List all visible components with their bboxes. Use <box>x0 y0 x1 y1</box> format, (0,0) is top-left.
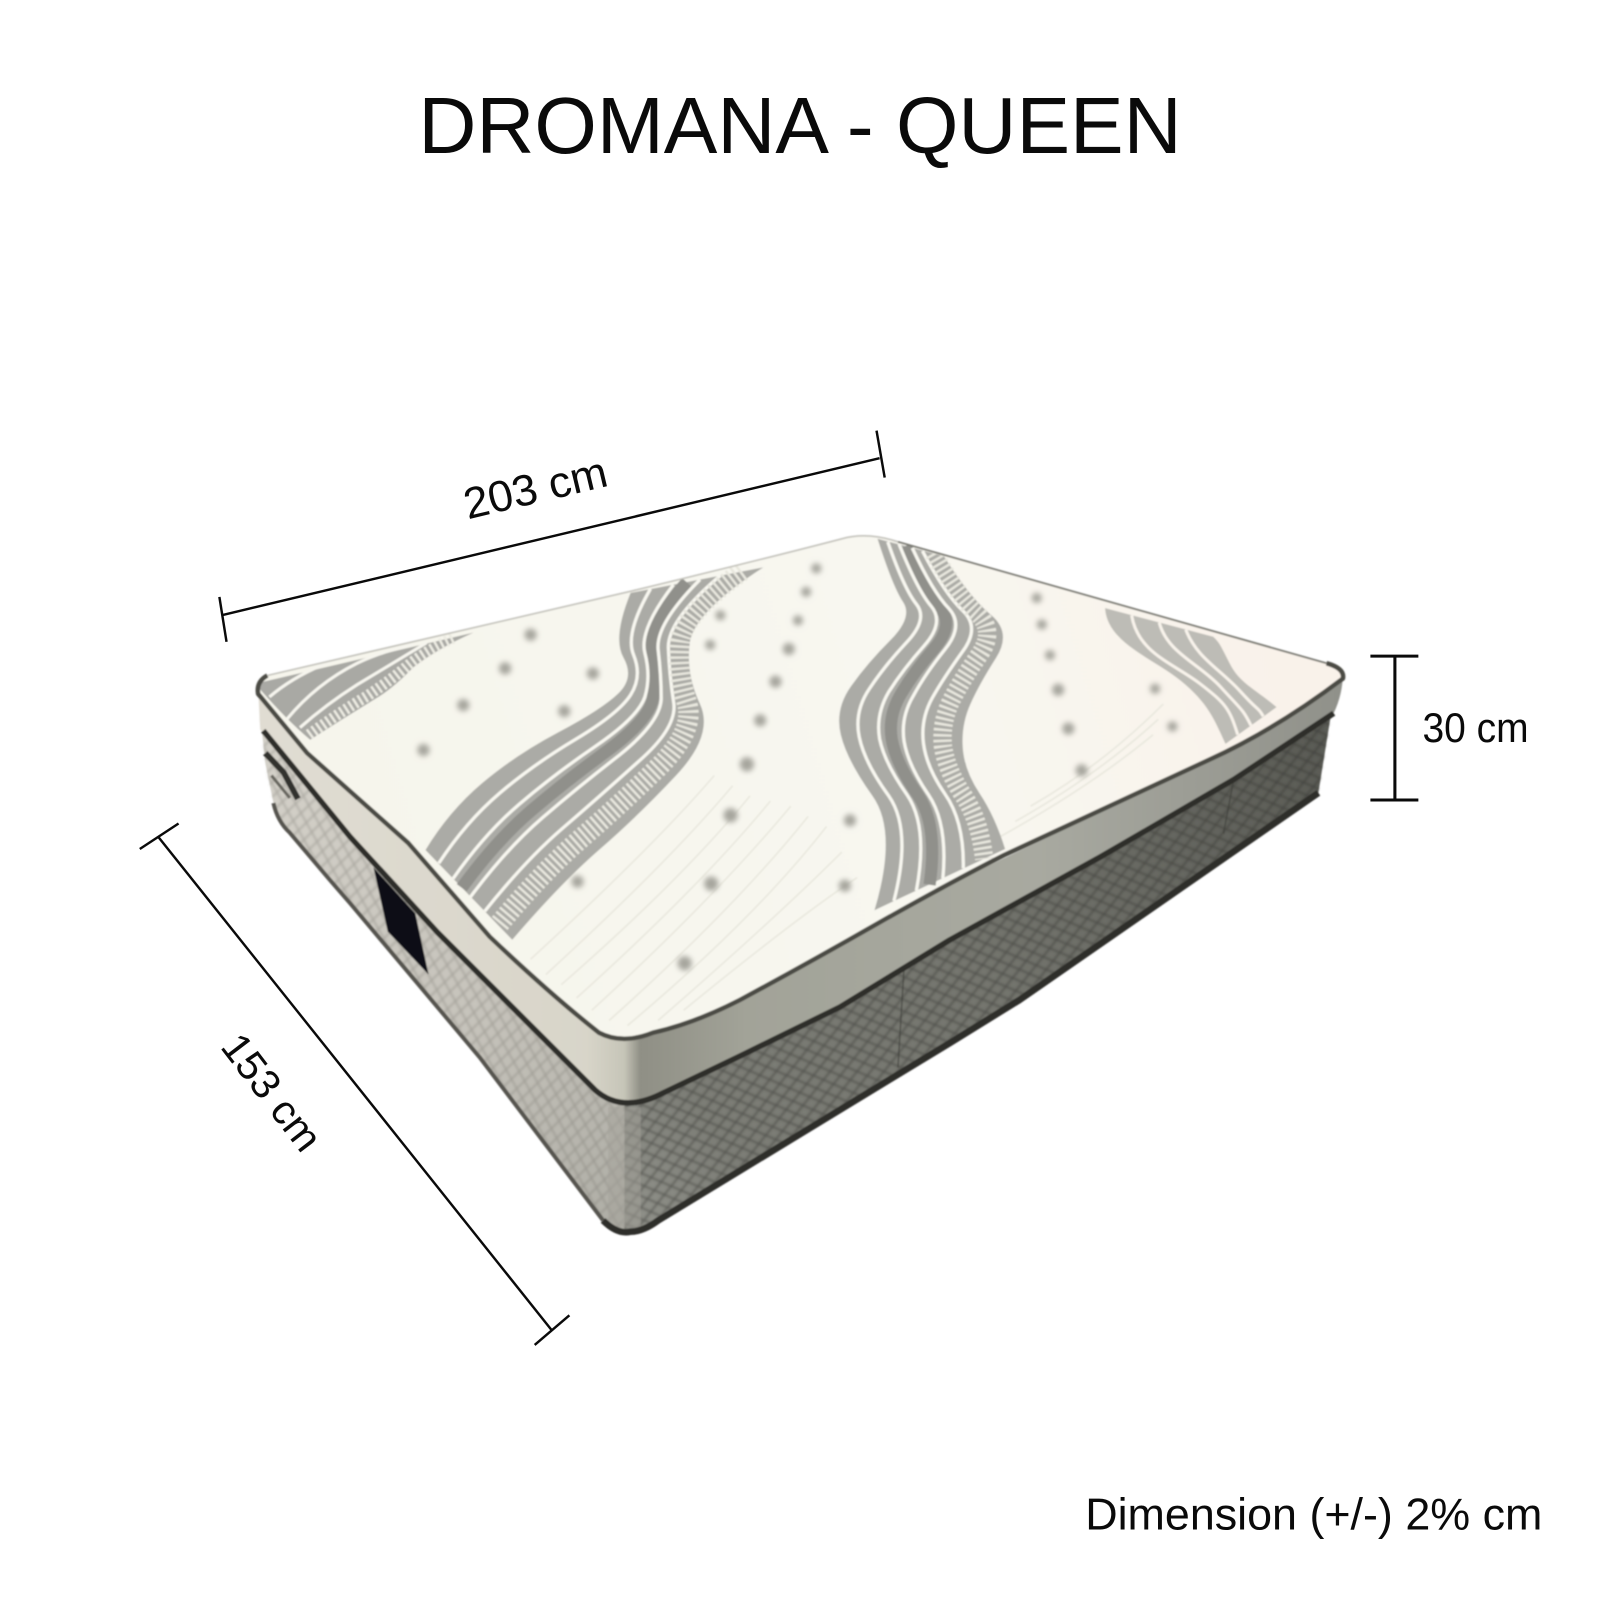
mattress illustration <box>255 536 1343 1232</box>
base front edge piping <box>603 793 1318 1232</box>
button tufts <box>417 563 1178 970</box>
dimension line: width 153 cm <box>140 823 569 1345</box>
infographic canvas <box>139 97 1540 1539</box>
back right edge outline <box>898 542 1327 663</box>
mattress top surface <box>258 536 1343 1039</box>
label: 30 cm: 30 cm <box>1422 704 1529 751</box>
black label on left face <box>373 867 429 974</box>
base panel seams <box>898 780 1234 1067</box>
top surface quilting details <box>255 539 1277 1026</box>
title: DROMANA - QUEEN <box>418 81 1182 170</box>
footnote: dimension tolerance: Dimension (+/-) 2% cm <box>1085 1491 1542 1540</box>
pillow-top side band <box>258 673 1343 1103</box>
dimension line: length 203 cm <box>219 431 885 642</box>
label: 153 cm: 153 cm <box>212 1024 331 1160</box>
top surface piping <box>258 663 1343 1039</box>
back edge soft outline <box>267 536 898 676</box>
wave stripe 2: centre left <box>426 567 763 940</box>
wave stripe 3: centre right <box>839 539 1005 910</box>
base left edge piping <box>273 803 603 1220</box>
label: 203 cm: 203 cm <box>459 448 612 529</box>
wave stripe 1: left corner <box>255 633 473 740</box>
side handle <box>265 753 298 799</box>
band lower piping <box>263 713 1334 1103</box>
corner shading <box>608 1107 641 1230</box>
fine fabric contour lines <box>531 704 1163 1026</box>
mattress base: left face <box>260 714 631 1232</box>
wave stripe 4: right corner <box>1105 608 1277 744</box>
mattress base: front face <box>624 704 1333 1232</box>
dimension line: height 30 cm <box>1370 656 1418 800</box>
